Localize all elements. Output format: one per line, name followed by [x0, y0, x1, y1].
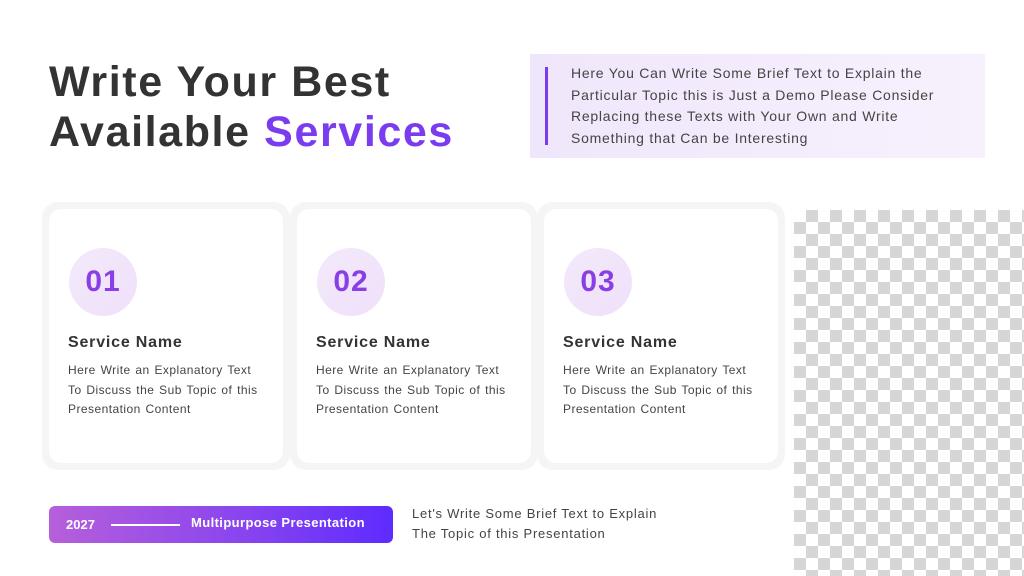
- card 2: Service Name: [316, 334, 431, 351]
- accent bar: [545, 67, 548, 145]
- card 3: To Discuss the Sub Topic of this: [563, 382, 753, 396]
- card 2: Presentation Content: [316, 402, 439, 416]
- intro paragraph: Something that Can be Interesting: [571, 130, 808, 146]
- intro paragraph: Replacing these Texts with Your Own and Write: [571, 108, 898, 124]
- intro paragraph: [571, 65, 934, 146]
- image placeholder checkerboard: [794, 210, 1024, 576]
- footer text: Let's Write Some Brief Text to Explain: [412, 506, 657, 521]
- title: [49, 58, 454, 156]
- card 1: [42, 202, 290, 470]
- card 2: To Discuss the Sub Topic of this: [316, 382, 506, 396]
- card 2: 02: [333, 265, 369, 298]
- card 1: Service Name: [68, 334, 183, 351]
- intro paragraph: Here You Can Write Some Brief Text to Explain the: [571, 65, 922, 81]
- card 1: 01: [85, 265, 121, 298]
- footer text: [412, 506, 657, 541]
- title: Write Your Best: [49, 58, 391, 106]
- card 3: Here Write an Explanatory Text: [563, 363, 746, 377]
- footer badge: 2027: [66, 517, 95, 532]
- footer badge: Multipurpose Presentation: [191, 515, 365, 530]
- card 1: Presentation Content: [68, 402, 191, 416]
- card 3: [537, 202, 785, 470]
- card 3: 03: [580, 265, 616, 298]
- intro paragraph: Particular Topic this is Just a Demo Please Consider: [571, 86, 934, 102]
- card 2: Here Write an Explanatory Text: [316, 363, 499, 377]
- card 1: To Discuss the Sub Topic of this: [68, 382, 258, 396]
- card 1: Here Write an Explanatory Text: [68, 363, 251, 377]
- title: Available Services: [49, 108, 454, 156]
- card 3: Presentation Content: [563, 402, 686, 416]
- footer badge: [49, 506, 393, 543]
- card 3: Service Name: [563, 334, 678, 351]
- intro text box: [530, 54, 985, 158]
- footer text: The Topic of this Presentation: [412, 526, 606, 541]
- card 2: [290, 202, 538, 470]
